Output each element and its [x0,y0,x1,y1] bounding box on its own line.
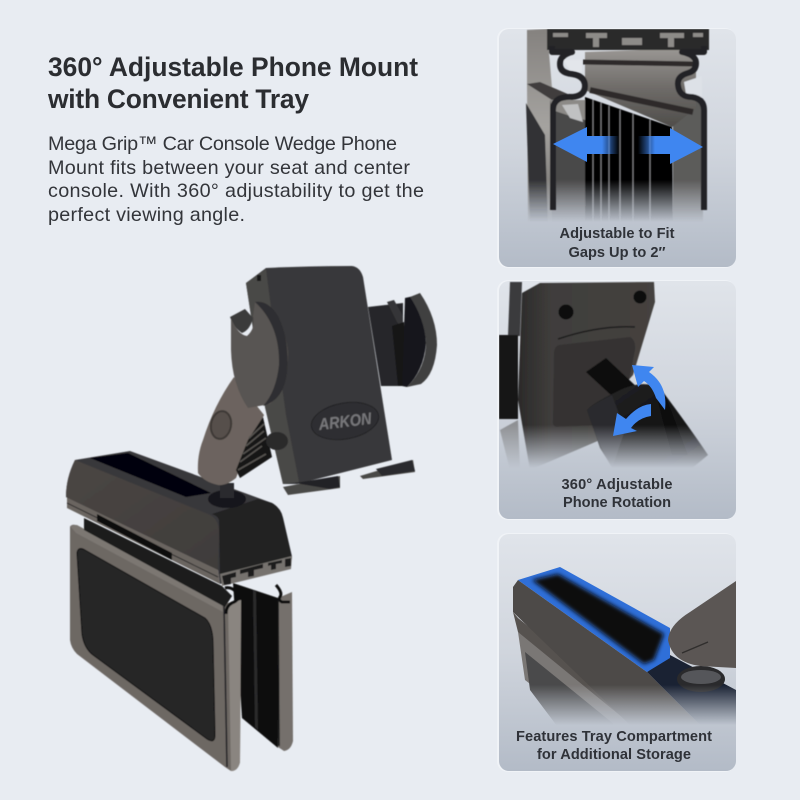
arrow: lower rotation [613,404,651,436]
panel: adjustable gap [497,28,736,268]
rail top [547,29,709,50]
right grip [368,293,437,387]
caption [560,226,675,261]
arrow: upper rotation [632,365,665,410]
panel: tray compartment [497,533,736,772]
caption: Phone Rotation [563,495,671,511]
caption [562,477,672,511]
logo: ARKON [317,410,373,434]
arrow: widen gap [553,127,703,164]
ball joint [208,483,246,508]
title [47,52,418,114]
caption: Gaps Up to 2″ [568,245,666,261]
caption: Features Tray Compartment [516,729,712,745]
side knob [266,432,288,450]
photo: expanded rail [526,29,709,225]
back plate and channel [233,583,293,751]
description text [48,133,424,226]
caption [516,729,712,763]
feet [283,460,415,495]
rail S-curves [225,585,290,614]
panel: 360 rotation [497,280,736,520]
photo: tray close-up [513,567,736,730]
phone holder [230,266,437,495]
tray body [66,451,292,614]
logo [308,397,382,445]
title: 360° Adjustable Phone Mount [48,52,418,82]
main back plate [246,266,392,484]
description text: perfect viewing angle. [48,204,245,226]
title: with Convenient Tray [47,84,309,114]
caption: Adjustable to Fit [560,226,675,242]
description text: Mega Grip™ Car Console Wedge Phone [48,133,397,155]
caption: for Additional Storage [537,747,691,763]
photo: plate and arm [499,282,708,470]
caption: 360° Adjustable [562,477,672,493]
product: wedge phone mount [66,266,437,771]
front plate [70,525,241,771]
description text: Mount fits between your seat and center [48,157,410,179]
left grip [230,302,288,408]
hex knob [209,409,233,441]
description text: console. With 360° adjustability to get the [48,180,424,202]
serpentine edges [563,60,582,72]
rail T-slots [220,556,292,586]
flexible arm [198,377,272,485]
